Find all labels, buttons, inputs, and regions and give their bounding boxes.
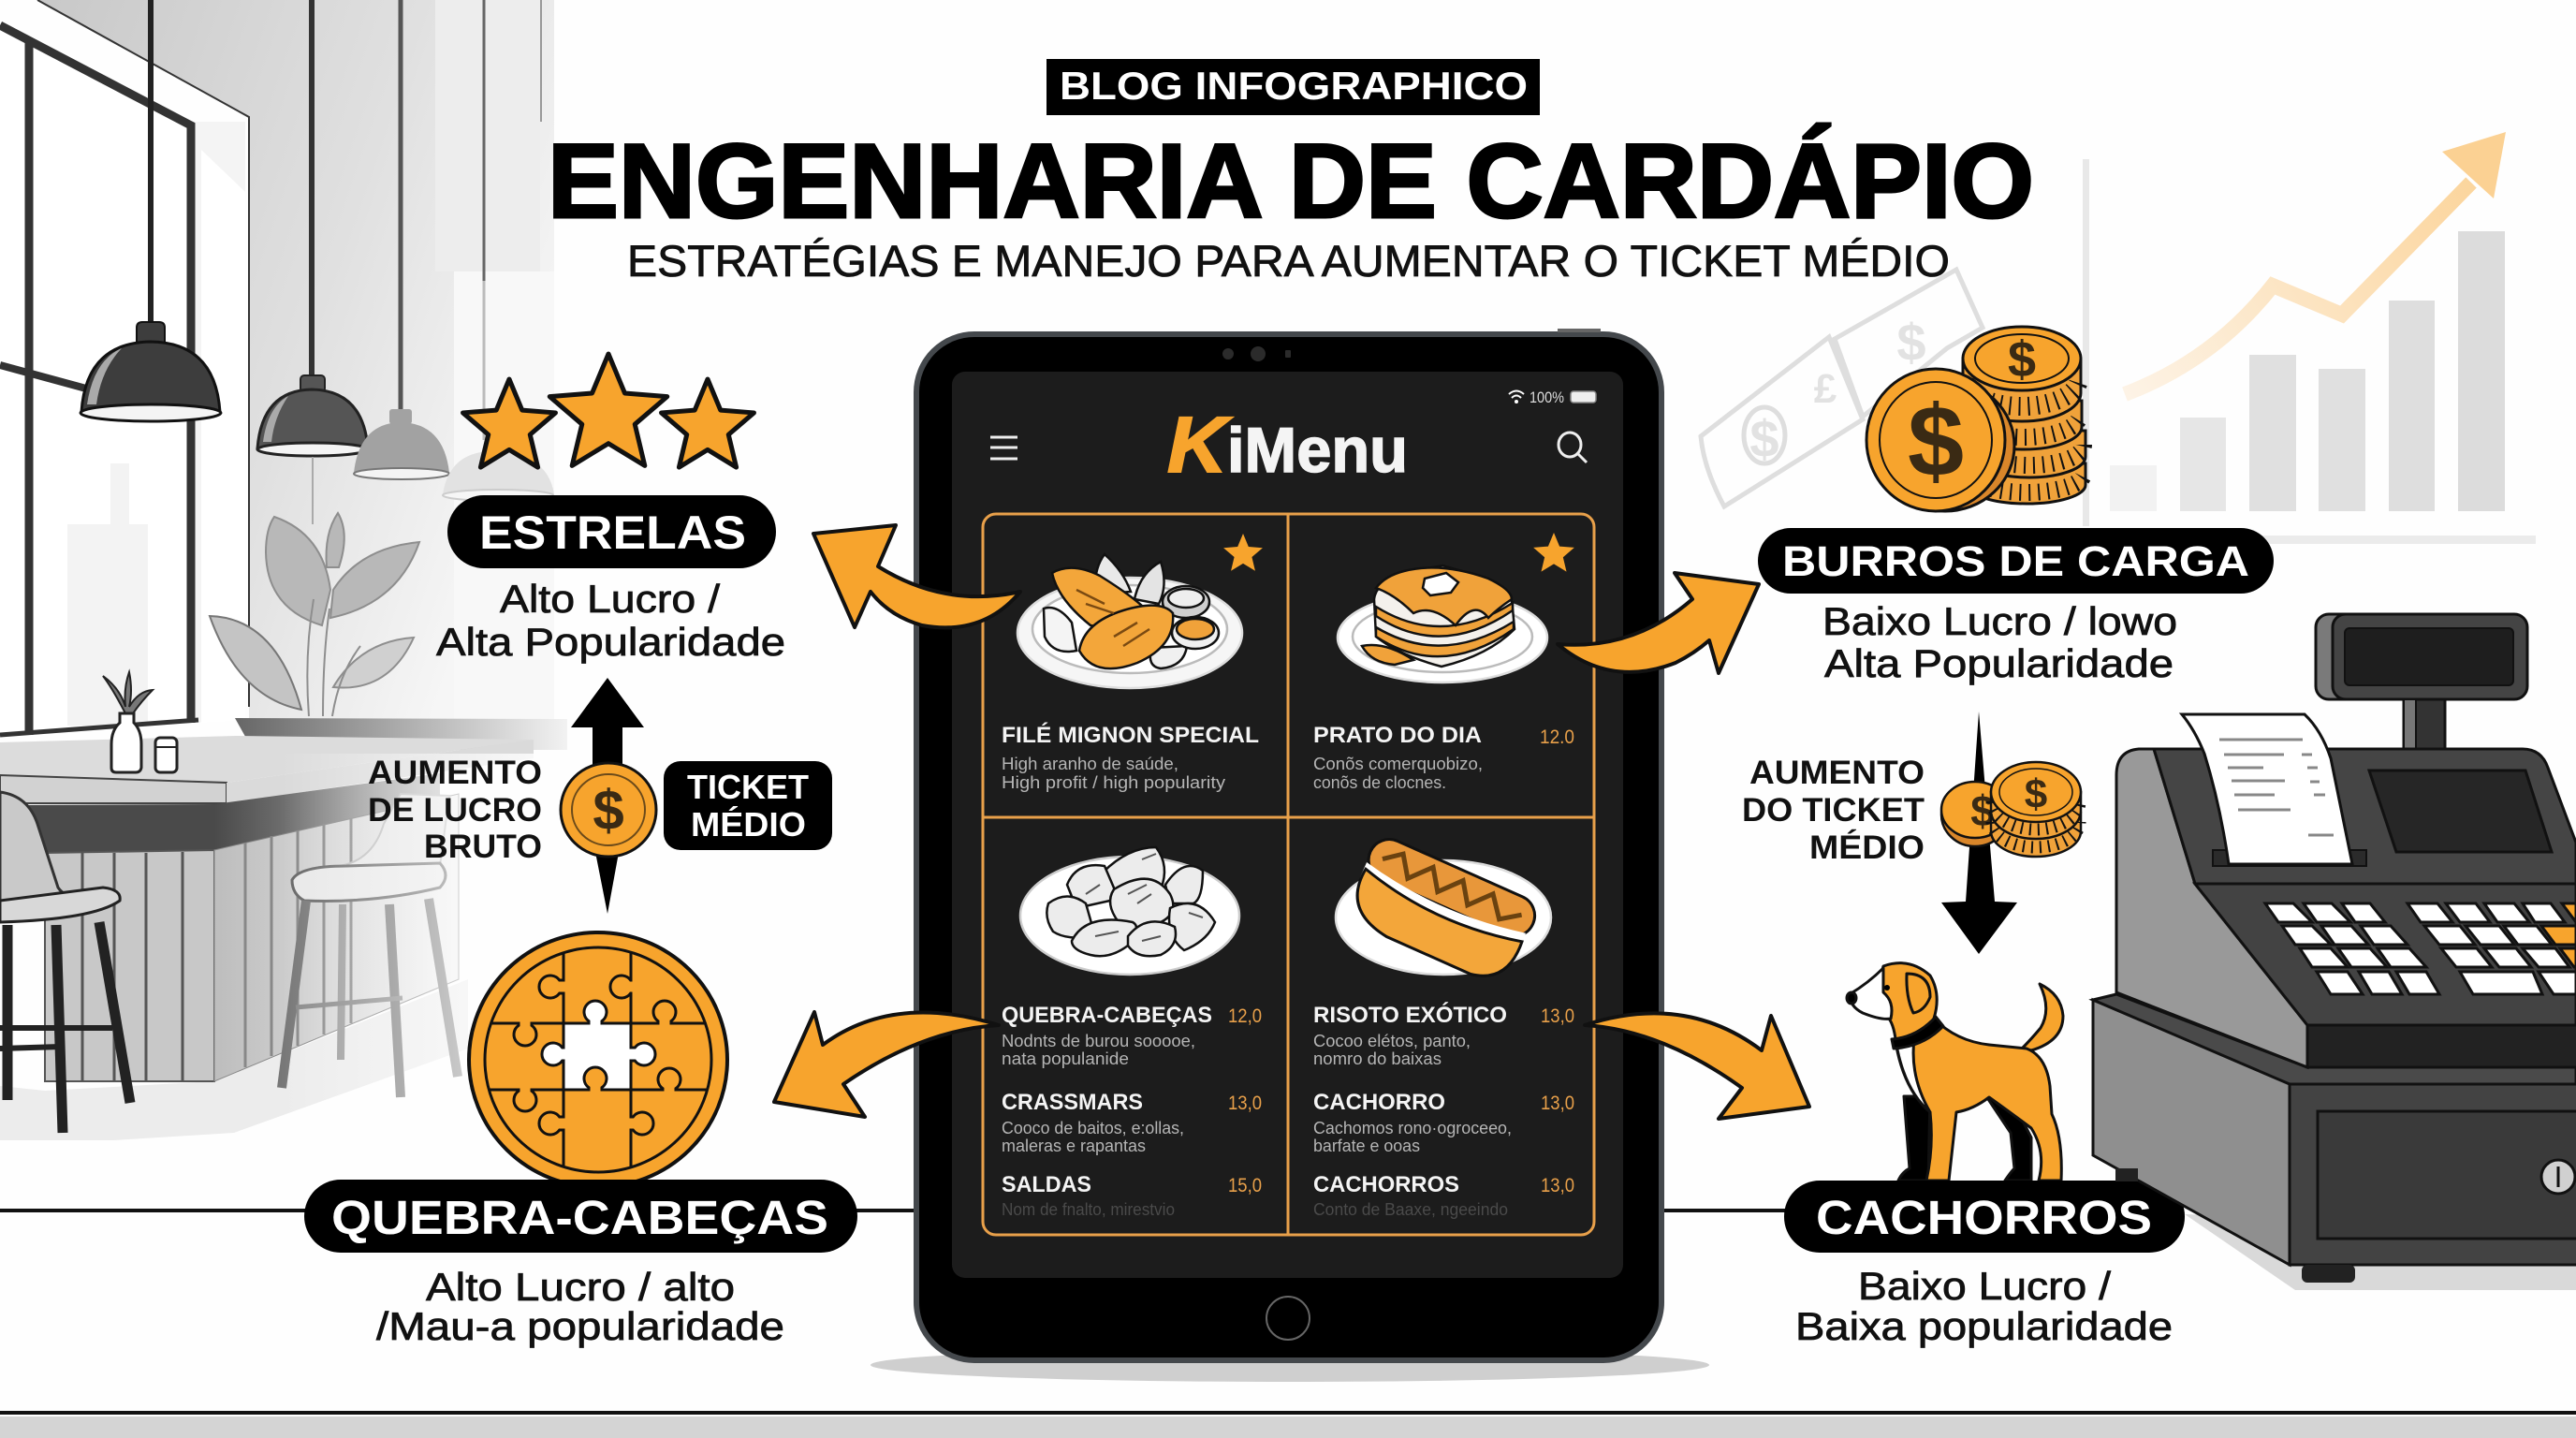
item: risoto exotico: 13,0 <box>1541 1005 1574 1027</box>
label: burros de carga: Baixo Lucro / lowo <box>1822 599 2177 643</box>
floor shadow <box>2185 1214 2576 1290</box>
label: cachorros: Baixo Lucro / <box>1858 1264 2111 1308</box>
title block <box>548 59 2034 286</box>
restaurant scene illustration <box>0 0 580 1147</box>
item: file mignon: High profit / high popularity <box>1002 773 1225 792</box>
stack <box>1963 327 2086 504</box>
body <box>2116 749 2576 1067</box>
logo: KiMenu: iMenu <box>1227 415 1408 486</box>
item: risoto exotico: Cocoo elétos, panto, <box>1313 1032 1471 1050</box>
dish: hot dog <box>1336 833 1551 989</box>
footer band <box>0 1411 2576 1438</box>
item: crassmars: 13,0 <box>1228 1093 1262 1114</box>
label: estrelas: Alta Popularidade <box>436 620 785 664</box>
icon: ghost banknotes: £ <box>1814 366 1837 412</box>
icon: ghost banknotes: $ <box>1896 313 1926 372</box>
item: saldas: SALDAS <box>1002 1172 1091 1197</box>
item: crassmars: Cooco de baitos, e:ollas, <box>1002 1119 1184 1137</box>
dish: chicken plate <box>1017 554 1242 688</box>
tablet shadow <box>871 1348 1709 1382</box>
item: prato do dia: 12.0 <box>1540 726 1574 748</box>
keypad <box>2265 903 2576 994</box>
dish: bread puffs <box>1020 847 1239 975</box>
label: ticket medio: TICKET <box>687 768 809 806</box>
item: risoto exotico: RISOTO EXÓTICO <box>1313 1002 1507 1028</box>
item: quebra-cabecas: Nodnts de burou sooooe, <box>1002 1032 1195 1050</box>
icon: dollar coin <box>561 763 656 857</box>
item: saldas: 15,0 <box>1228 1175 1262 1196</box>
label: aumento do ticket medio: MÉDIO <box>1809 829 1925 866</box>
label: cachorros: Baixa popularidade <box>1795 1304 2173 1348</box>
base <box>2093 994 2576 1283</box>
dish: pancake stack <box>1338 565 1547 682</box>
label: quebra-cabecas: /Mau-a popularidade <box>376 1304 784 1348</box>
item: cachorro: CACHORRO <box>1313 1090 1445 1115</box>
tag: blog infographico: BLOG INFOGRAPHICO <box>1060 64 1528 108</box>
item: crassmars <box>1002 1090 1262 1155</box>
subtitle: ESTRATÉGIAS E MANEJO PARA AUMENTAR O TICKET MÉDIO <box>627 236 1950 286</box>
icon: ghost banknotes <box>1701 270 1983 506</box>
icon: small coins: $ <box>1970 786 1995 835</box>
label: aumento do ticket medio: DO TICKET <box>1742 792 1925 829</box>
home button <box>1266 1297 1310 1340</box>
item: crassmars: CRASSMARS <box>1002 1090 1143 1115</box>
item: risoto exotico: nomro do baixas <box>1313 1049 1442 1068</box>
tablet <box>916 329 1661 1360</box>
icon: three stars <box>463 354 754 467</box>
label: estrelas: Alto Lucro / <box>500 577 720 621</box>
illustration: cash register <box>2093 614 2576 1290</box>
item: quebra-cabecas: QUEBRA-CABEÇAS <box>1002 1003 1212 1028</box>
logo: KiMenu <box>1167 401 1408 489</box>
label: burros de carga <box>1758 528 2274 685</box>
arrow: to cachorros <box>1585 1013 1809 1119</box>
item: file mignon <box>1002 722 1259 792</box>
item: cachorro: 13,0 <box>1541 1093 1574 1114</box>
label: estrelas <box>436 495 785 664</box>
item: quebra-cabecas <box>1002 1003 1262 1068</box>
item: quebra-cabecas: nata populanide <box>1002 1049 1129 1068</box>
receipt <box>2182 714 2366 866</box>
front coin: $ <box>1908 384 1964 497</box>
stool left <box>0 792 84 913</box>
label: aumento do ticket medio: AUMENTO <box>1749 755 1925 791</box>
front coin <box>1866 369 2014 511</box>
icon: coin stack <box>1866 327 2086 511</box>
heading: ENGENHARIA DE CARDÁPIO <box>548 123 2034 240</box>
cameras <box>1222 346 1291 361</box>
ground line <box>0 1209 1872 1212</box>
logo: KiMenu: K <box>1167 401 1233 489</box>
pendant lamps <box>148 0 154 324</box>
arrow: down <box>1941 712 2017 954</box>
item: saldas: Nom de fnalto, mirestvio <box>1002 1200 1175 1219</box>
label: quebra-cabecas: QUEBRA-CABEÇAS <box>331 1191 828 1244</box>
item: prato do dia <box>1313 723 1574 792</box>
star badges <box>1223 533 1574 572</box>
item: cachorro: Cachomos rono·ogroceeo, <box>1313 1119 1512 1137</box>
label: ticket medio <box>664 761 832 850</box>
menu grid <box>983 514 1594 1235</box>
item: cachorros: 13,0 <box>1541 1175 1574 1196</box>
item: cachorro <box>1313 1090 1574 1155</box>
stool middle <box>318 794 449 867</box>
status bar <box>1509 389 1596 406</box>
item: file mignon: High aranho de saúde, <box>1002 755 1178 773</box>
wall <box>37 0 554 749</box>
label: aumento de lucro bruto <box>368 755 542 865</box>
item: prato do dia: PRATO DO DIA <box>1313 723 1482 748</box>
display <box>2316 614 2527 751</box>
icon: small coins: $ <box>2025 771 2047 817</box>
label: aumento do ticket medio <box>1742 755 1925 866</box>
menu items <box>1002 722 1574 1219</box>
label: estrelas: ESTRELAS <box>479 506 746 559</box>
icon: ghost banknotes: $ <box>1749 409 1779 468</box>
item: prato do dia: conõs de clocnes. <box>1313 773 1446 792</box>
window <box>0 26 191 735</box>
label: cachorros: CACHORROS <box>1816 1191 2152 1244</box>
item: cachorro: barfate e ooas <box>1313 1137 1420 1155</box>
icon: dog <box>1847 963 2063 1181</box>
item: file mignon: FILÉ MIGNON SPECIAL <box>1002 722 1259 748</box>
icon: dollar coin: $ <box>593 779 624 842</box>
arrow: to quebra-cabecas <box>774 1012 999 1117</box>
icon: small coins <box>1941 762 2081 857</box>
label: burros de carga: Alta Popularidade <box>1824 641 2174 685</box>
screen <box>952 372 1623 1278</box>
item: prato do dia: Conõs comerquobizo, <box>1313 755 1483 773</box>
icon: menu <box>990 437 1017 459</box>
stack: $ <box>2008 331 2036 388</box>
label: quebra-cabecas <box>304 1180 857 1348</box>
item: cachorros: Conto de Baaxe, ngeeindo <box>1313 1200 1508 1219</box>
vase and cup <box>103 672 177 772</box>
label: cachorros <box>1784 1181 2185 1348</box>
tag: blog infographico <box>1046 59 1540 115</box>
item: quebra-cabecas: 12,0 <box>1228 1005 1262 1027</box>
item: crassmars: maleras e rapantas <box>1002 1137 1146 1155</box>
counter <box>0 979 468 1140</box>
plant <box>210 513 419 716</box>
arrow: to estrelas <box>813 525 1020 627</box>
arrow: up with coin <box>561 678 656 914</box>
missing piece <box>542 1001 655 1090</box>
chart: growth <box>2083 132 2536 544</box>
label: ticket medio: MÉDIO <box>691 805 806 844</box>
bars <box>2110 231 2505 511</box>
icon: search <box>1559 433 1587 462</box>
fade <box>281 754 580 1147</box>
item: saldas <box>1002 1172 1262 1219</box>
label: aumento de lucro bruto: BRUTO <box>424 829 542 865</box>
arrow: to burros de carga <box>1558 573 1759 673</box>
label: burros de carga: BURROS DE CARGA <box>1782 537 2249 585</box>
icon: puzzle coin <box>468 932 730 1189</box>
item: risoto exotico <box>1313 1002 1574 1068</box>
status bar: 100% <box>1530 389 1564 406</box>
item: cachorros <box>1313 1172 1574 1219</box>
label: aumento de lucro bruto: DE LUCRO <box>368 792 542 829</box>
item: cachorros: CACHORROS <box>1313 1172 1459 1197</box>
label: quebra-cabecas: Alto Lucro / alto <box>426 1265 735 1309</box>
trend arrow <box>2125 132 2506 394</box>
label: aumento de lucro bruto: AUMENTO <box>368 755 542 791</box>
